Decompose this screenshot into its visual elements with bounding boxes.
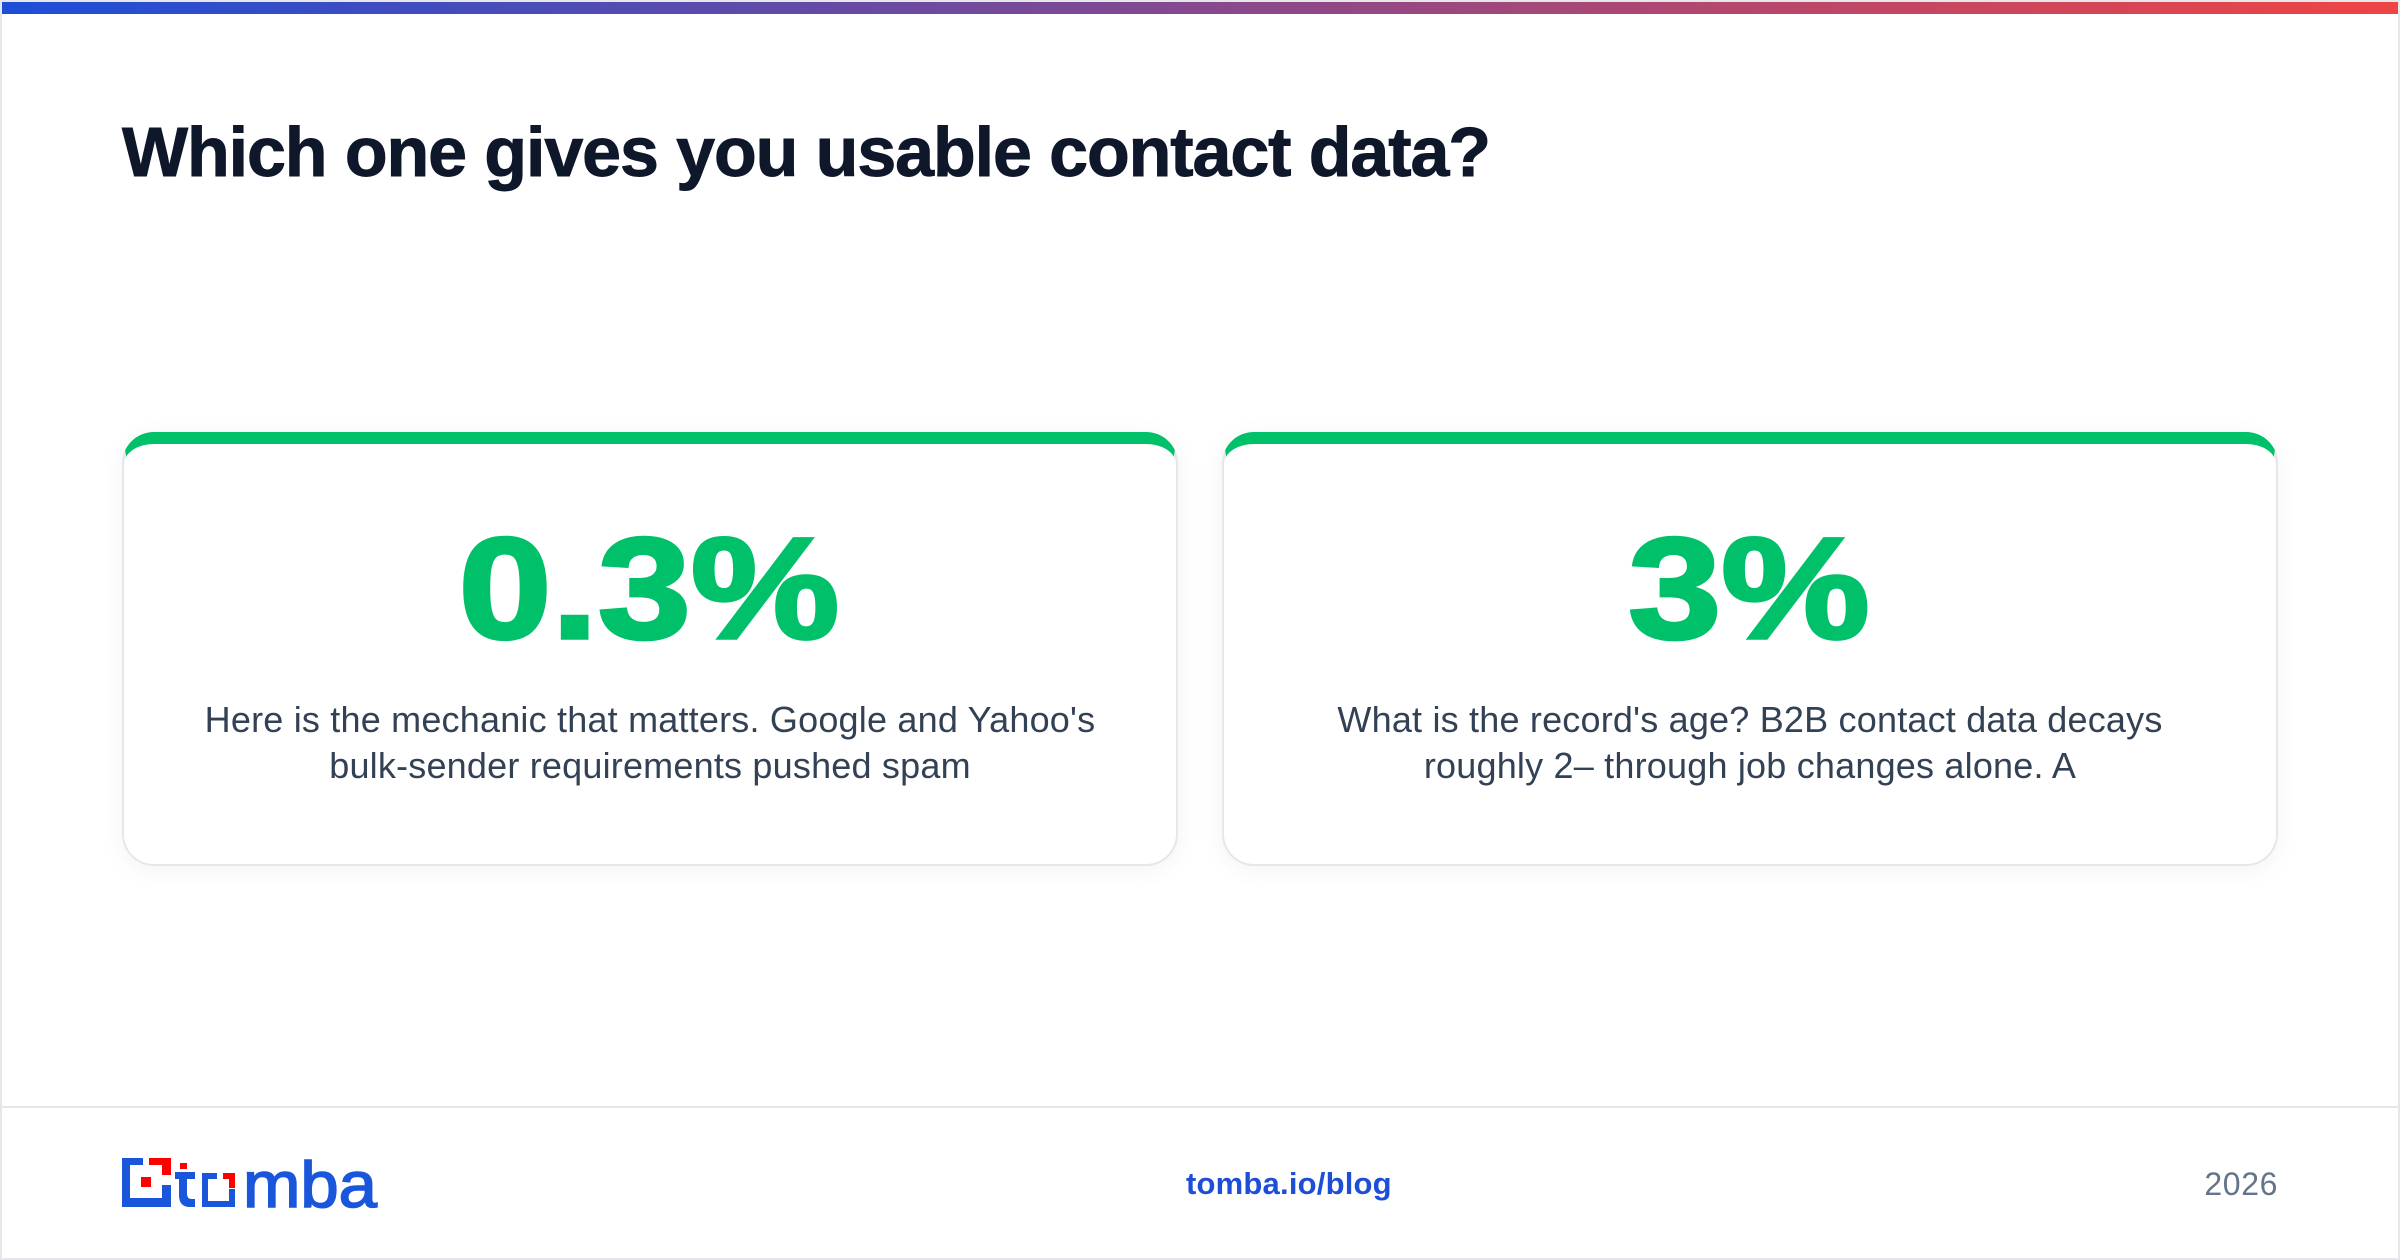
stat description: record age: roughly 2– through job changes alone. A [1424, 745, 2076, 786]
stat description: spam mechanic: bulk-sender requirements pushed spam [329, 745, 971, 786]
title: Which one gives you usable contact data? [122, 113, 1490, 191]
stat description: spam mechanic [205, 699, 1095, 786]
panel: 0.3% stat card [122, 432, 1178, 866]
stat description: record age: What is the record's age? B2B contact data decays [1337, 699, 2163, 740]
logo: tomba [122, 1150, 378, 1214]
stat number: 0.3%: 0.3% [459, 508, 839, 669]
footer link: tomba.io/blog [1186, 1166, 1392, 1201]
stat number: 3%: 3% [1628, 508, 1870, 669]
panel: 3% stat card [1222, 432, 2278, 866]
stat description: record age [1337, 699, 2163, 786]
stat description: spam mechanic: Here is the mechanic that matters. Google and Yahoo's [205, 699, 1095, 740]
footer year: 2026 [2204, 1166, 2278, 1202]
